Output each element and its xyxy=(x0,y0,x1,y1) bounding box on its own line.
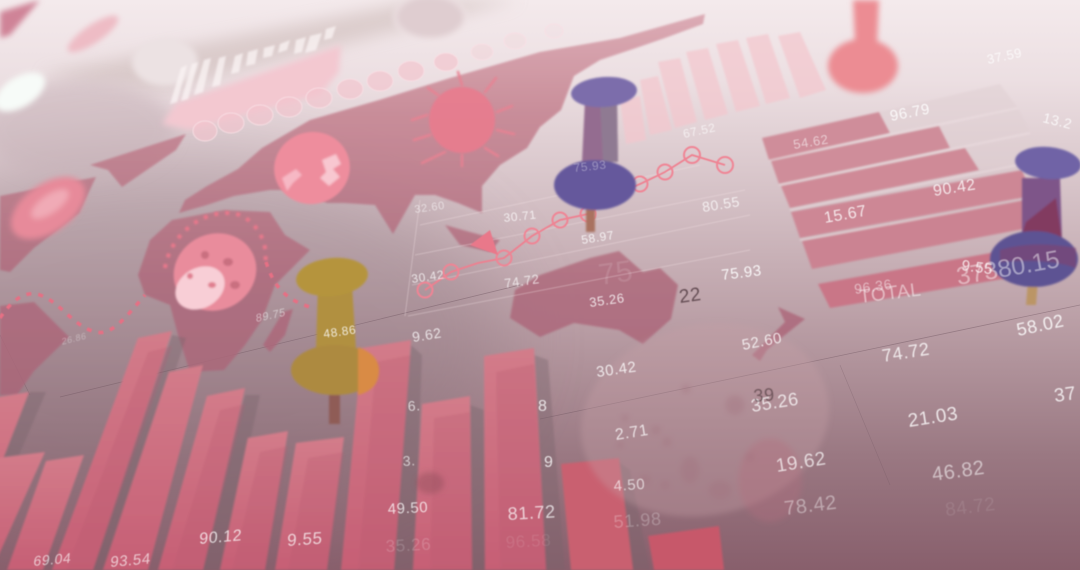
numbers: bottom bars: 49.50 xyxy=(387,499,429,518)
bar xyxy=(158,388,245,570)
numbers: lower right: 4.50 xyxy=(613,476,646,495)
map: South America xyxy=(0,302,69,395)
numbers: line chart: 30.42 xyxy=(410,268,445,286)
numbers: bar panel: 37380.15 xyxy=(954,245,1062,291)
numbers: lower right: 58.02 xyxy=(1015,310,1066,340)
numbers: bottom bars: 35.26 xyxy=(385,535,432,556)
numbers: lower right: 19.62 xyxy=(774,448,828,477)
right horizontal bar chart xyxy=(762,84,1060,308)
top bar chart xyxy=(162,26,826,144)
map: Greenland xyxy=(90,134,186,187)
numbers: lower right: 21.03 xyxy=(906,403,960,432)
bar xyxy=(484,348,546,570)
numbers: bottom bars: 90.12 xyxy=(199,526,243,548)
numbers: lower right: 52.60 xyxy=(741,330,784,354)
bar xyxy=(220,431,288,570)
bottom bar chart xyxy=(0,331,724,570)
numbers: line chart: 74.72 xyxy=(503,271,541,291)
numbers: line chart: 22 xyxy=(678,284,703,308)
chart grid xyxy=(405,165,750,316)
numbers: bottom bars: 9.62 xyxy=(411,325,443,345)
bar xyxy=(7,455,84,570)
icon: dotted virus xyxy=(161,213,269,324)
numbers: line chart: 80.55 xyxy=(701,193,741,215)
numbers: bottom bars: 96.58 xyxy=(505,531,552,552)
numbers: lower right xyxy=(595,310,1078,532)
white mini bars xyxy=(170,26,336,104)
icon: red virus xyxy=(412,72,514,166)
map: Southeast Asia xyxy=(445,225,500,252)
bar xyxy=(771,126,950,184)
bar: 54.62 xyxy=(762,112,890,160)
numbers: bottom bars: 8 xyxy=(538,398,548,415)
bar: 15.67 / 90.42 xyxy=(791,170,1032,238)
dashed curve right xyxy=(266,262,310,307)
bar xyxy=(0,452,45,570)
world map xyxy=(0,14,805,395)
bar xyxy=(0,392,29,570)
numbers: bar panel: 9.55 xyxy=(960,257,994,278)
chart markers xyxy=(418,147,733,298)
numbers: bar panel xyxy=(792,45,1074,308)
bar xyxy=(802,198,1050,269)
bar xyxy=(561,458,633,570)
bar inner shading xyxy=(66,346,546,570)
numbers: line chart: 75 xyxy=(596,254,635,292)
light pink bars xyxy=(620,32,826,144)
push pin: blue centre xyxy=(554,75,638,232)
numbers: lower right: 84.72 xyxy=(944,494,997,521)
numbers: bar panel: 54.62 xyxy=(792,132,830,152)
numbers: bar panel: 96.79 xyxy=(889,101,932,125)
numbers: bottom bars: 89.75 xyxy=(256,307,286,325)
numbers: lower right: 78.42 xyxy=(783,492,838,520)
icon: left pink patch xyxy=(0,164,96,252)
numbers: lower right: 74.72 xyxy=(880,339,931,366)
map: Madagascar xyxy=(263,309,293,352)
numbers: bottom bars: 9 xyxy=(544,454,554,471)
numbers: line chart: 30.71 xyxy=(503,208,537,225)
numbers: lower right: 46.82 xyxy=(931,457,986,486)
bar xyxy=(103,365,203,570)
numbers: lower right: 30.42 xyxy=(595,358,638,381)
numbers: bar panel: 37.59 xyxy=(986,45,1023,67)
numbers: lower right: 51.98 xyxy=(613,509,662,532)
shadows xyxy=(0,335,650,570)
map: North America xyxy=(0,177,96,272)
numbers: bar panel: TOTAL xyxy=(858,280,923,308)
bar xyxy=(413,396,472,570)
panel: pink strip xyxy=(162,45,341,130)
map: Australia xyxy=(510,251,678,344)
icon: pink sphere xyxy=(266,123,358,213)
numbers: bottom bars: 81.72 xyxy=(507,502,556,524)
icon: large pale virus xyxy=(416,301,847,539)
chart line xyxy=(425,155,725,290)
numbers: bar panel: 13.2 xyxy=(1041,109,1074,132)
numbers: bottom bars xyxy=(33,307,556,570)
triangle marker xyxy=(470,230,498,255)
numbers: lower right: 2.71 xyxy=(614,422,650,444)
push pin: yellow xyxy=(291,254,379,424)
numbers: lower right: 37 xyxy=(1053,383,1078,407)
numbers: bottom bars: 26.86 xyxy=(61,331,87,347)
numbers: bottom bars: 9.55 xyxy=(287,528,323,550)
line chart xyxy=(405,147,750,316)
decorative top objects xyxy=(0,0,465,120)
bar xyxy=(341,340,411,570)
numbers: bottom bars: 48.86 xyxy=(322,323,357,341)
numbers: line chart: 35.26 xyxy=(588,290,626,310)
numbers: bottom bars: 3. xyxy=(402,452,416,469)
numbers: line chart: 67.52 xyxy=(682,120,717,141)
numbers: line chart: 32.60 xyxy=(414,200,446,216)
numbers: bottom bars: 69.04 xyxy=(33,550,72,569)
map: Eurasia xyxy=(179,14,705,234)
numbers: bar panel: 15.67 xyxy=(823,203,868,227)
numbers: bar panel: 96.36 xyxy=(853,276,893,297)
numbers: lower right: 39 xyxy=(753,384,776,406)
dashed curve xyxy=(0,294,145,333)
push pin: top red xyxy=(828,0,898,93)
numbers: line chart: 75.93 xyxy=(573,158,607,175)
numbers: line chart xyxy=(410,120,763,310)
numbers: bottom bars: 6. xyxy=(407,397,421,414)
bar xyxy=(781,148,979,208)
map: New Zealand xyxy=(752,307,805,361)
numbers: lower right: 35.26 xyxy=(749,389,800,416)
ring row xyxy=(193,24,563,141)
numbers: line chart: 75.93 xyxy=(720,262,763,284)
row lines xyxy=(769,108,1060,240)
bar xyxy=(275,437,344,570)
push pin: blue right xyxy=(990,144,1080,305)
numbers: bar panel: 90.42 xyxy=(932,176,977,200)
bar: total xyxy=(818,245,1045,308)
bar xyxy=(52,331,172,570)
map: Africa xyxy=(138,210,310,372)
numbers: line chart: 58.97 xyxy=(580,228,615,247)
bar xyxy=(648,526,724,570)
pale background bars xyxy=(880,84,1044,170)
